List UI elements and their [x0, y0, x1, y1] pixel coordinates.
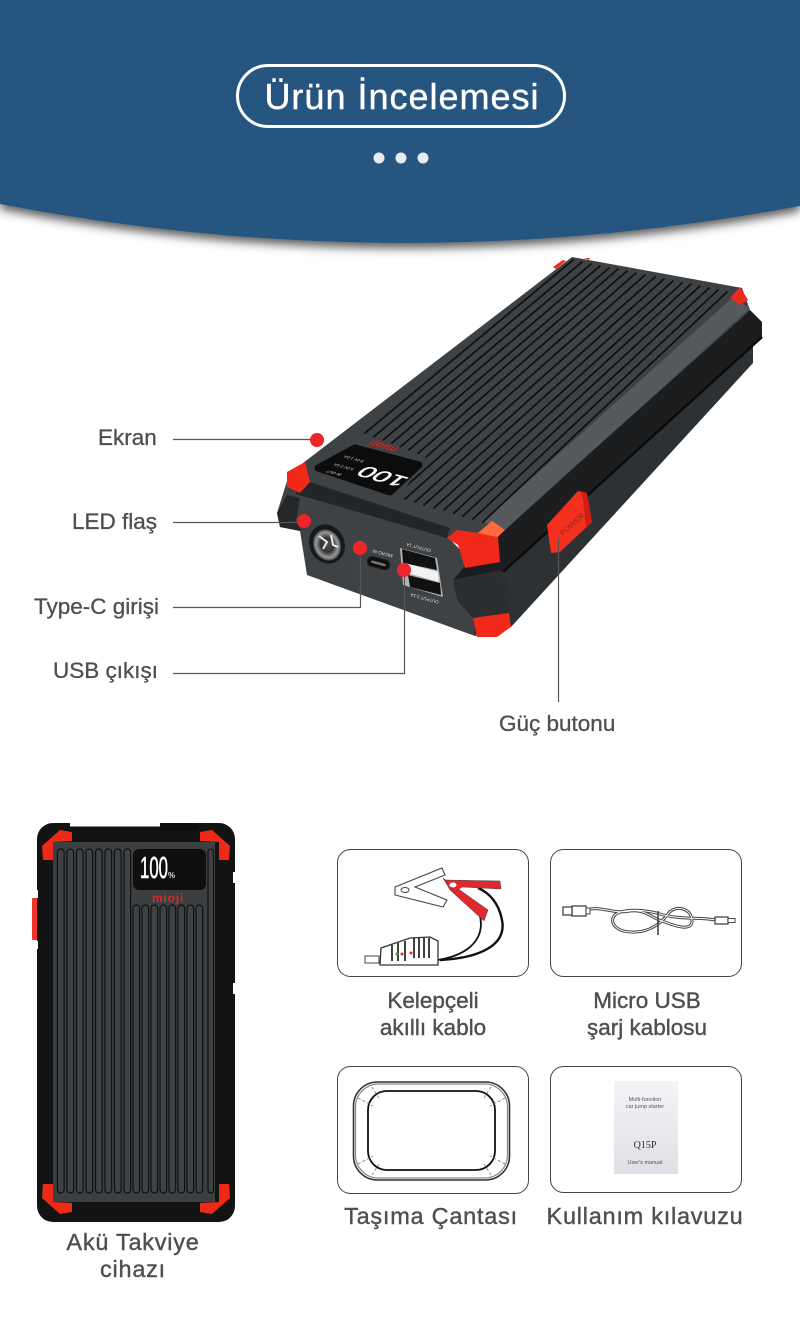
- red corners: [42, 830, 230, 1214]
- caption: Micro USB şarj kablosu: şarj kablosu: [587, 1015, 707, 1040]
- caption: Micro USB şarj kablosu: Micro USB: [593, 988, 701, 1013]
- callout: Ekran: [98, 425, 324, 450]
- title: Ürün İncelemesi: [264, 76, 540, 117]
- caption: Kelepçeli akıllı kablo: akıllı kablo: [380, 1015, 486, 1040]
- front face: [277, 478, 475, 636]
- vertical ribs: [58, 849, 214, 1193]
- front display: [133, 849, 206, 890]
- card: micro usb cable: [550, 850, 742, 976]
- card: clamp cable: [338, 850, 528, 976]
- front display: 100: [140, 850, 168, 885]
- icon: user manual: [614, 1081, 678, 1174]
- upper side lip: [453, 310, 762, 580]
- usb ports: OUTPUT 2.1A: [410, 592, 439, 605]
- caption: Kelepçeli akıllı kablo: [380, 988, 486, 1040]
- brand logo: mioji: [364, 438, 402, 455]
- type-c port: MICRO IN: [372, 548, 393, 558]
- body: [37, 823, 235, 1222]
- grey band: [483, 298, 750, 530]
- power button: [547, 491, 592, 553]
- icon: user manual: User's manual: [628, 1160, 662, 1166]
- caption: device: [66, 1229, 200, 1282]
- icon: clamp cable: [365, 868, 503, 965]
- card: carrying case: [338, 1066, 528, 1194]
- card: user manual: [550, 1066, 742, 1192]
- display: 100: [352, 463, 414, 489]
- caption: device: cihazı: [100, 1256, 166, 1282]
- usb ports: OUTPUT 1A: [406, 542, 431, 553]
- caption: Taşıma Çantası: Taşıma Çantası: [344, 1203, 518, 1229]
- display: 9.0V 1.0A: [342, 455, 365, 463]
- side button: [32, 898, 41, 940]
- display: [318, 448, 419, 492]
- product: jump starter perspective view: [277, 257, 762, 637]
- ribs: [317, 260, 727, 522]
- callout: Ekran: Ekran: [98, 425, 157, 450]
- callout: Type-C girişi: Type-C girişi: [34, 594, 159, 619]
- type-c port: [366, 548, 393, 571]
- front logo: mioji: [152, 891, 184, 905]
- icon: user manual: Multi-function: [629, 1097, 661, 1103]
- display: IN OUT: [324, 469, 343, 476]
- callout: USB çıkışı: USB çıkışı: [53, 658, 158, 683]
- caption: device: Akü Takviye: [66, 1229, 200, 1255]
- flashlight: [303, 518, 351, 570]
- icon: user manual: car jump starter: [626, 1104, 664, 1110]
- header dots: [374, 152, 428, 164]
- usb ports: [400, 542, 443, 605]
- header banner: [0, 0, 800, 243]
- callout: USB çıkışı: [53, 563, 411, 683]
- callout: LED flaş: LED flaş: [72, 509, 157, 534]
- title: [238, 66, 564, 126]
- callout: Type-C girişi: [34, 541, 367, 619]
- caption: Kelepçeli akıllı kablo: Kelepçeli: [387, 988, 479, 1013]
- callout: Güç butonu: Güç butonu: [499, 711, 615, 736]
- product: front view device: [32, 822, 236, 1222]
- icon: usb cable: [563, 906, 735, 935]
- callout: LED flaş: [72, 509, 311, 534]
- caption: Micro USB şarj kablosu: [587, 988, 707, 1040]
- icon: user manual: Q15P: [634, 1140, 657, 1151]
- red corner protectors: [287, 258, 748, 637]
- display: 5.0V 2.5A: [332, 463, 355, 471]
- front bevel: [296, 478, 450, 538]
- icon: carrying case: [354, 1082, 510, 1180]
- lower side body: [452, 335, 753, 636]
- front display: %: [168, 871, 175, 880]
- display area patch: [300, 433, 426, 500]
- power button: POWER: [558, 511, 587, 538]
- top face: [288, 257, 750, 537]
- caption: Kullanım kılavuzu: Kullanım kılavuzu: [547, 1203, 743, 1229]
